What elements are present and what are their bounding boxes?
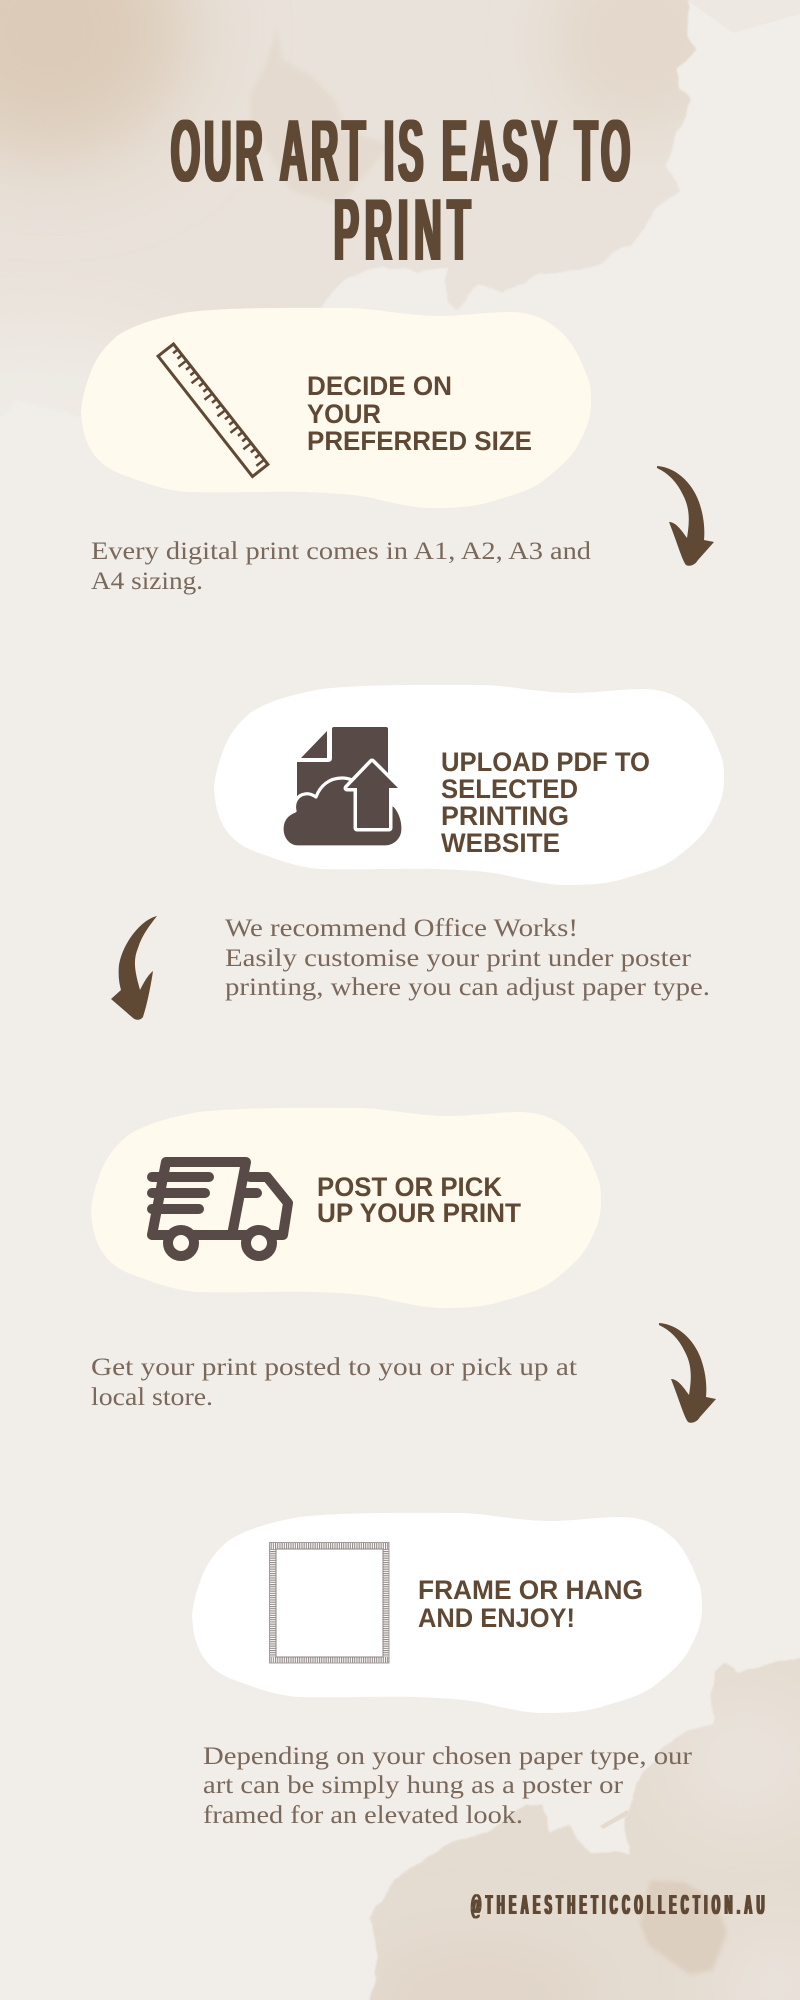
heading: step 2: PRINTING xyxy=(441,801,569,831)
text: step 3 description xyxy=(91,1352,577,1411)
text: step 1 description xyxy=(91,536,591,595)
text: step 1 description: A4 sizing. xyxy=(91,566,203,595)
arrow: step 2 to step 3 xyxy=(111,916,157,1020)
icon: delivery truck xyxy=(152,1162,288,1256)
heading: step 2: WEBSITE xyxy=(441,828,560,858)
watercolor wash: bottom xyxy=(369,1658,800,2000)
heading: step 3: UP YOUR PRINT xyxy=(317,1198,521,1228)
text: step 4 description xyxy=(203,1741,693,1829)
icon: ruler xyxy=(158,344,268,476)
text: step 2 description: Easily customise your print under poster xyxy=(225,943,692,972)
text: step 3 description: local store. xyxy=(91,1382,213,1411)
icon: document with cloud upload xyxy=(282,727,403,847)
arrow: step 1 to step 2 xyxy=(657,466,714,566)
text: step 2 description: We recommend Office Works! xyxy=(225,913,578,942)
social handle: @THEAESTHETICCOLLECTION.AU xyxy=(471,1890,764,1921)
text: step 4 description: framed for an elevated look. xyxy=(203,1800,523,1829)
heading: step 2: SELECTED xyxy=(441,774,578,804)
panel: step 4 frame or hang xyxy=(192,1513,702,1713)
text: step 1 description: Every digital print comes in A1, A2, A3 and xyxy=(91,536,591,565)
heading: step 1: PREFERRED SIZE xyxy=(307,426,532,456)
text: step 3 description: Get your print posted to you or pick up at xyxy=(91,1352,577,1381)
title xyxy=(171,103,630,279)
heading: step 1 xyxy=(307,371,532,456)
heading: step 1: YOUR xyxy=(307,399,381,429)
watercolor wash: top xyxy=(0,0,696,359)
text: step 4 description: Depending on your chosen paper type, our xyxy=(203,1741,693,1770)
panel: step 1 choose size xyxy=(81,308,591,508)
text: step 2 description xyxy=(225,913,710,1001)
title line 2: PRINT xyxy=(334,182,470,279)
icon: picture frame xyxy=(269,1542,390,1664)
text: step 2 description: printing, where you can adjust paper type. xyxy=(225,972,710,1001)
heading: step 2 xyxy=(441,747,650,858)
panel: step 3 post or pick up xyxy=(91,1108,601,1308)
heading: step 3: POST OR PICK xyxy=(317,1172,502,1202)
heading: step 1: DECIDE ON xyxy=(307,371,452,401)
heading: step 2: UPLOAD PDF TO xyxy=(441,747,650,777)
heading: step 4 xyxy=(418,1575,643,1633)
panel: step 2 upload xyxy=(214,685,724,885)
heading: step 3 xyxy=(317,1172,521,1228)
heading: step 4: AND ENJOY! xyxy=(418,1603,575,1633)
heading: step 4: FRAME OR HANG xyxy=(418,1575,643,1605)
text: step 4 description: art can be simply hung as a poster or xyxy=(203,1770,624,1799)
arrow: step 3 to step 4 xyxy=(659,1323,716,1423)
title line 1: OUR ART IS EASY TO xyxy=(171,103,630,200)
